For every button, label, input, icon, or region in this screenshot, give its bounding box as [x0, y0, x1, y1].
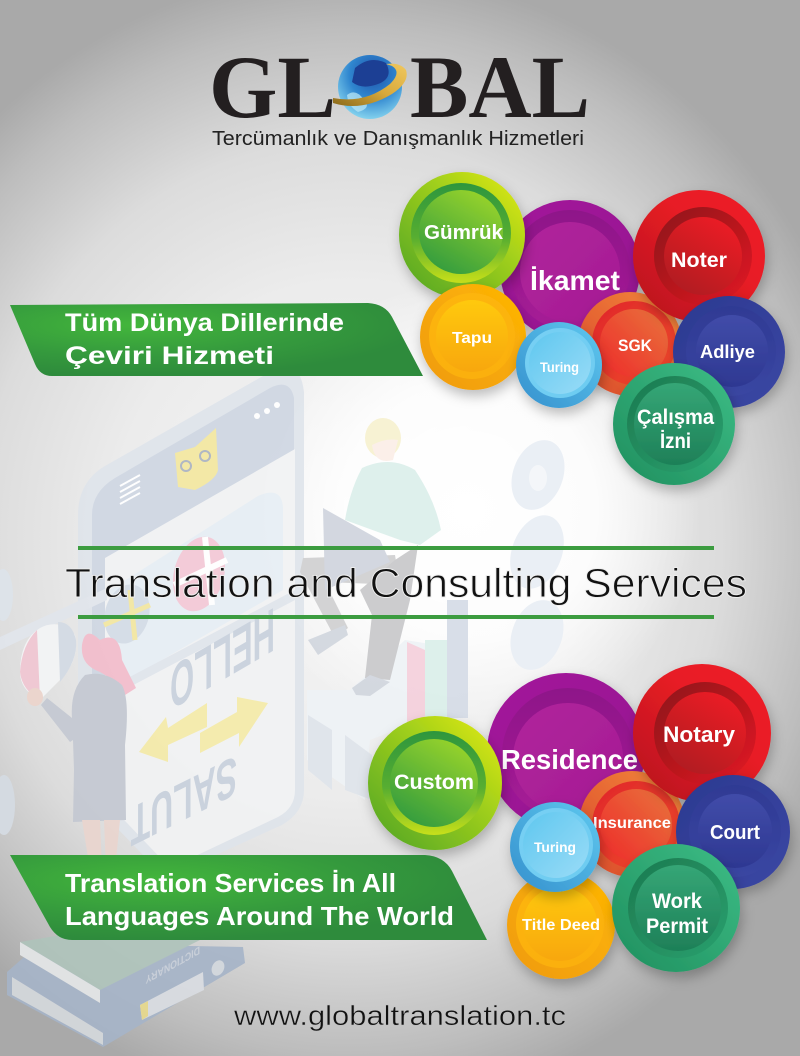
illustration: stacked books	[7, 925, 245, 1047]
icon: microphone bubble	[501, 593, 573, 677]
title: Translation and Consulting Services	[65, 560, 747, 606]
logo text: BAL: BAL	[410, 39, 590, 137]
bubble: SGK: SGK	[618, 336, 653, 355]
decorative edge bubbles	[0, 569, 13, 621]
icon: red white flag bubble	[165, 531, 233, 617]
bubble: Adliye	[673, 296, 785, 408]
icon: owl	[175, 428, 218, 490]
bubble: Çalışma İzni	[613, 363, 735, 485]
icon: dots	[254, 402, 280, 419]
illustration: server box and books	[307, 600, 468, 800]
icon: chat bubble	[501, 508, 573, 596]
bubble: Gümrük	[399, 172, 525, 298]
bubble: Notary: Notary	[663, 722, 736, 747]
website url: www.globaltranslation.tc	[233, 1000, 566, 1031]
banner: bottom English	[10, 855, 487, 940]
background illustration: translation app scene	[0, 367, 574, 1047]
bubble: İkamet: İkamet	[530, 265, 620, 296]
bubble: Turing: Turing	[540, 359, 579, 375]
bubble: Adliye: Adliye	[700, 342, 755, 362]
bubble: SGK	[578, 292, 682, 396]
bubble: Tapu	[420, 284, 526, 390]
banner: bottom English: Languages Around The World	[65, 901, 454, 931]
label: HELLO: HELLO	[170, 594, 275, 724]
bubble: Title Deed	[507, 871, 615, 979]
bubble cluster: Turkish services	[399, 172, 785, 485]
bubble: Court: Court	[710, 822, 760, 844]
bubble: Çalışma İzni: Çalışma	[637, 406, 714, 429]
logo: GLOBAL	[209, 39, 590, 137]
icon: blue yellow flag bubble	[98, 579, 156, 649]
bubble: Residence	[487, 673, 645, 831]
bubble: Turing	[510, 802, 600, 892]
bubble: Residence: Residence	[501, 744, 638, 775]
bubble: Work Permit: Work	[652, 890, 702, 913]
illustration: stacked books: DICTIONARY	[146, 943, 200, 986]
divider top	[78, 546, 714, 550]
bubble: Noter	[633, 190, 765, 322]
banner: top Turkish: Çeviri Hizmeti	[65, 342, 274, 370]
bubble: Work Permit	[612, 844, 740, 972]
tagline: Tercümanlık ve Danışmanlık Hizmetleri	[212, 128, 584, 150]
illustration: woman	[27, 634, 136, 870]
illustration: man	[300, 418, 441, 696]
bubble: Notary	[633, 664, 771, 802]
icon: idea bubble	[502, 433, 574, 517]
banner: bottom English: Translation Services İn All	[65, 868, 396, 898]
bubble: Work Permit: Permit	[646, 915, 708, 938]
bubble: Gümrük: Gümrük	[424, 222, 504, 244]
bubble: Insurance: Insurance	[593, 815, 671, 832]
divider bottom	[78, 615, 714, 619]
bubble: Court	[676, 775, 790, 889]
background glow	[200, 260, 720, 760]
bubble: Insurance	[579, 771, 685, 877]
bubble: Turing: Turing	[534, 839, 576, 855]
banner: top Turkish: Tüm Dünya Dillerinde	[65, 309, 344, 337]
bubble: Custom: Custom	[394, 771, 474, 794]
bubble cluster: English services	[368, 664, 790, 979]
bubble: Çalışma İzni: İzni	[660, 430, 691, 453]
icon: menu lines	[120, 475, 140, 504]
banner: top Turkish	[10, 303, 423, 376]
bubble: Custom	[368, 716, 502, 850]
logo text: GL: GL	[209, 39, 336, 137]
bubble: İkamet	[500, 200, 640, 340]
bubble: Turing	[516, 322, 602, 408]
icon: left and right arrows	[139, 697, 268, 762]
bubble: Tapu: Tapu	[452, 330, 492, 347]
bubble: Title Deed: Title Deed	[522, 917, 600, 934]
icon: france flag bubble	[20, 622, 76, 700]
illustration: phone	[0, 367, 304, 878]
label: SALUT: SALUT	[130, 743, 237, 860]
bubble: Noter: Noter	[671, 249, 727, 272]
icon: globe with gold ring	[333, 55, 407, 119]
